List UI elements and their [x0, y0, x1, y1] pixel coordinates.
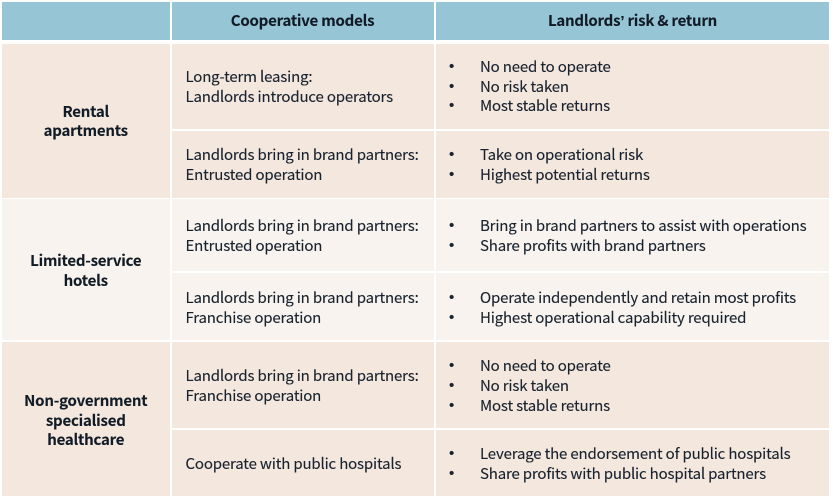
risk and return: long-term leasing	[436, 44, 829, 128]
model: hotel franchise operation: Landlords bring in brand partners:	[186, 287, 419, 308]
risk and return: healthcare franchise operation: Most stable returns	[480, 395, 610, 416]
model: cooperate with public hospitals: Cooperate with public hospitals	[186, 453, 401, 474]
model: hotel entrusted operation: Entrusted operation	[186, 235, 322, 256]
sector label: Non-government specialised healthcare: specialised	[46, 410, 126, 431]
sector label: Limited-service hotels: Limited-service	[30, 250, 141, 271]
model: rental entrusted operation: Entrusted operation	[186, 164, 322, 185]
model: healthcare franchise operation	[172, 342, 434, 428]
sector label: Rental apartments: apartments	[44, 120, 128, 141]
risk and return: rental entrusted operation	[436, 130, 829, 198]
risk and return: hotel entrusted operation	[436, 199, 829, 271]
risk and return: public hospitals: Leverage the endorsement of public hospitals	[480, 443, 790, 464]
risk and return: hotel entrusted operation: Bring in brand partners to assist with operations	[480, 215, 806, 236]
risk and return: hotel franchise operation: Operate independently and retain most profits	[480, 287, 796, 308]
sector label: Rental apartments: Rental	[62, 101, 109, 122]
risk and return: long-term leasing: No risk taken	[480, 76, 569, 97]
risk and return: long-term leasing: Most stable returns	[480, 95, 610, 116]
model: healthcare franchise operation: Franchise operation	[186, 385, 321, 406]
model: hotel entrusted operation: Landlords bring in brand partners:	[186, 215, 419, 236]
sector label: Rental apartments	[2, 44, 170, 198]
model: rental entrusted operation	[172, 130, 434, 198]
sector label: Limited-service hotels	[2, 199, 170, 340]
risk and return: public hospitals: Share profits with public hospital partners	[480, 463, 766, 484]
model: healthcare franchise operation: Landlords bring in brand partners:	[186, 365, 419, 386]
model: hotel entrusted operation	[172, 199, 434, 271]
sector label: Non-government specialised healthcare: healthcare	[47, 429, 124, 450]
header: blank corner cell	[2, 2, 170, 40]
risk and return: hotel franchise operation	[436, 273, 829, 340]
model: long-term leasing	[172, 44, 434, 128]
model: hotel franchise operation	[172, 273, 434, 340]
sector label: Limited-service hotels: hotels	[64, 270, 108, 291]
risk and return: healthcare franchise operation: No need to operate	[480, 355, 611, 376]
risk and return: hotel entrusted operation: Share profits with brand partners	[480, 235, 706, 256]
sector label: Non-government specialised healthcare	[2, 342, 170, 496]
header: Landlords' risk and return: Landlords’ risk & return	[548, 10, 717, 31]
risk and return: hotel franchise operation: Highest operational capability required	[480, 306, 746, 328]
model: cooperate with public hospitals	[172, 430, 434, 496]
model: long-term leasing: Landlords introduce operators	[186, 86, 393, 106]
header: Cooperative models	[172, 2, 434, 40]
model: rental entrusted operation: Landlords bring in brand partners:	[186, 144, 419, 165]
risk and return: rental entrusted operation: Take on operational risk	[480, 144, 643, 165]
risk and return: healthcare franchise operation: No risk taken	[480, 375, 569, 396]
header: Cooperative models: Cooperative models	[231, 10, 374, 31]
risk and return: public hospitals	[436, 430, 829, 496]
header: Landlords' risk and return	[436, 2, 829, 40]
risk and return: rental entrusted operation: Highest potential returns	[480, 164, 650, 185]
model: hotel franchise operation: Franchise operation	[186, 306, 321, 328]
risk and return: long-term leasing: No need to operate	[480, 56, 611, 77]
risk and return: healthcare franchise operation	[436, 342, 829, 428]
model: long-term leasing: Long-term leasing:	[186, 66, 312, 87]
sector label: Non-government specialised healthcare: Non-government	[24, 390, 147, 411]
